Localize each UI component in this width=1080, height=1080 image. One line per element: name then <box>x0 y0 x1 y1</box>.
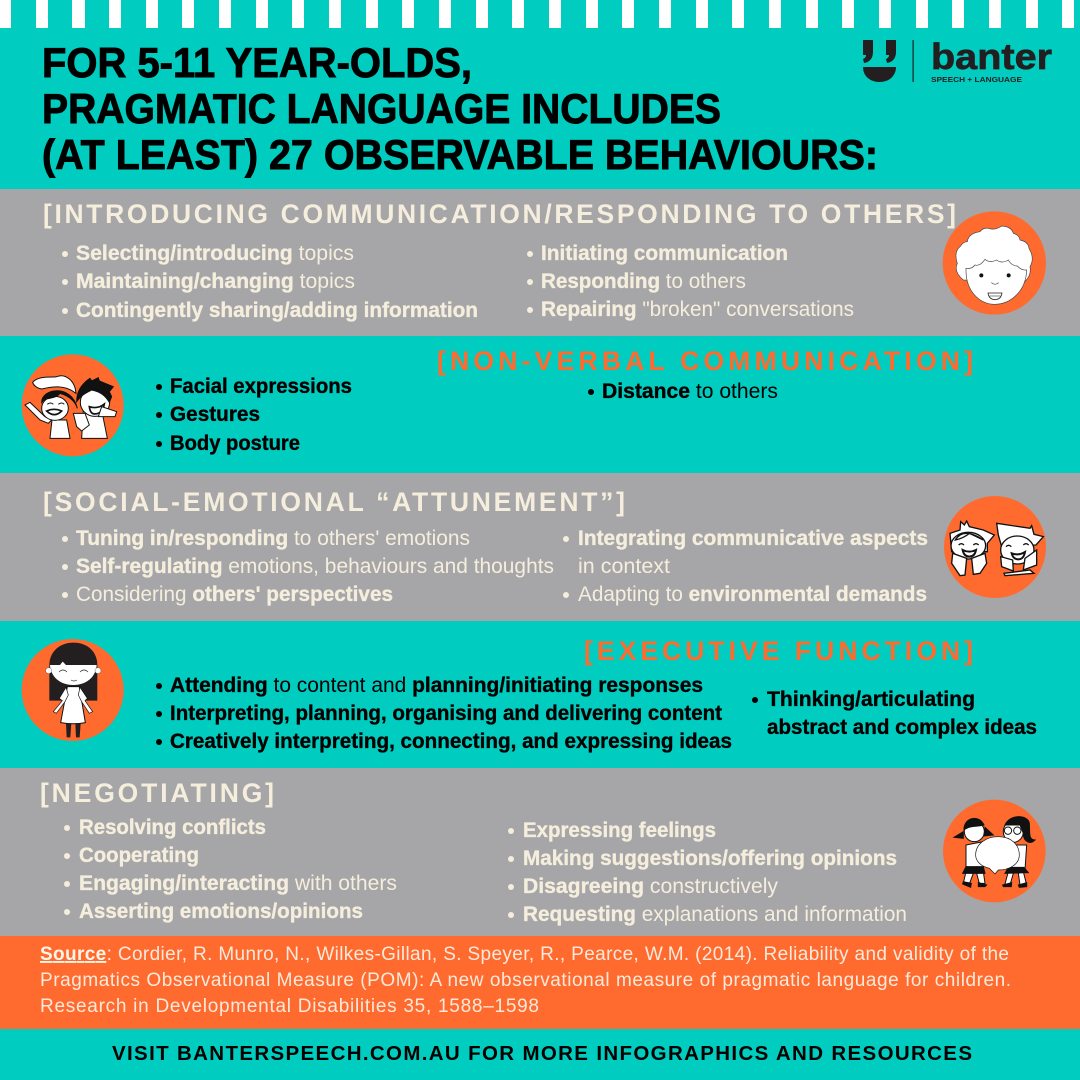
panel: introducing communication <box>0 189 1080 336</box>
text: source citation <box>40 944 1011 1017</box>
bullet list: right: Adapting to environmental demands <box>578 582 927 606</box>
bullet list: left: Tuning in/responding to others' emotions <box>76 526 470 550</box>
bullet list: left: Resolving conflicts <box>79 815 266 839</box>
logo: banter speech and language: SPEECH + LANGUAGE <box>931 75 1022 84</box>
bullet list: right: Integrating communicative aspects <box>578 526 928 550</box>
bullet list: left: Contingently sharing/adding information <box>76 298 478 322</box>
bullet list: right: in context <box>578 554 670 578</box>
panel: social-emotional attunement <box>0 473 1080 621</box>
panel: executive function <box>0 621 1080 768</box>
logo: banter speech and language <box>863 36 1052 84</box>
bullet list: left: Gestures <box>170 402 260 426</box>
bullet list: right: Disagreeing constructively <box>523 874 778 898</box>
icon: two children resting on hands <box>944 496 1046 598</box>
bullet list: right: Requesting explanations and information <box>523 902 907 926</box>
heading: executive function: [EXECUTIVE FUNCTION] <box>584 636 973 666</box>
text: source citation: Pragmatics Observational Measure (POM): A new observational measure of pragmatic language for children. <box>40 970 1011 991</box>
bullet list: left: Engaging/interacting with others <box>79 871 397 895</box>
bullet list: right <box>527 241 854 321</box>
bullet list: left: Body posture <box>170 431 300 455</box>
heading: social-emotional attunement: [SOCIAL-EMOTIONAL “ATTUNEMENT”] <box>43 487 625 517</box>
footer call to action: VISIT BANTERSPEECH.COM.AU FOR MORE INFOGRAPHICS AND RESOURCES <box>112 1042 972 1065</box>
bullet list: left <box>64 815 397 923</box>
bullet list: right: Distance to others <box>602 379 778 403</box>
icon: curly-haired child <box>943 211 1046 315</box>
bullet list: right: Repairing "broken" conversations <box>541 297 854 321</box>
bullet list: left: Cooperating <box>79 843 199 867</box>
bullet list: left: Self-regulating emotions, behaviours and thoughts <box>76 554 554 578</box>
icon: two laughing children <box>22 354 124 456</box>
bullet list: left: Attending to content and planning/initiating responses <box>170 673 703 697</box>
logo: banter speech and language: banter <box>931 36 1052 77</box>
bullet list: left: Selecting/introducing topics <box>76 241 354 265</box>
heading: non-verbal communication: [NON-VERBAL COMMUNICATION] <box>437 346 973 376</box>
heading: introducing communication: [INTRODUCING COMMUNICATION/RESPONDING TO OTHERS] <box>43 199 956 229</box>
panel: non-verbal communication <box>0 336 1080 473</box>
bullet list: right <box>752 687 1037 739</box>
bullet list: right: Expressing feelings <box>523 818 716 842</box>
text: source citation: Source: Cordier, R. Munro, N., Wilkes-Gillan, S. Speyer, R., Pearce, W.M. (2014). Reliability and validity of the <box>40 944 1009 965</box>
icon: girl with dark hair <box>22 639 124 741</box>
bullet list: left: Considering others' perspectives <box>76 582 393 606</box>
title: (AT LEAST) 27 OBSERVABLE BEHAVIOURS: <box>42 131 878 178</box>
panel: source <box>0 936 1080 1029</box>
bullet list: right: Initiating communication <box>541 241 788 265</box>
bullet list: left: Creatively interpreting, connecting, and expressing ideas <box>170 729 732 753</box>
bullet list: left <box>156 673 732 753</box>
text: source citation: Research in Developmental Disabilities 35, 1588–1598 <box>40 996 539 1017</box>
bullet list: right: Responding to others <box>541 269 746 293</box>
heading: negotiating: [NEGOTIATING] <box>40 778 274 808</box>
bullet list: right <box>563 526 928 606</box>
title <box>42 39 878 178</box>
bullet list: left <box>156 374 352 455</box>
icon: two girls with speech bubble <box>943 800 1046 902</box>
bullet list: right <box>508 818 907 926</box>
bullet list: left: Interpreting, planning, organising and delivering content <box>170 701 722 725</box>
bullet list: right: Thinking/articulating <box>767 687 975 711</box>
bullet list: left: Asserting emotions/opinions <box>79 899 363 923</box>
bullet list: left: Facial expressions <box>170 374 352 398</box>
bullet list: left: Maintaining/changing topics <box>76 269 355 293</box>
bullet list: right: Making suggestions/offering opinions <box>523 846 897 870</box>
panel: negotiating <box>0 768 1080 936</box>
title: FOR 5-11 YEAR-OLDS, <box>42 39 472 86</box>
bullet list: right: abstract and complex ideas <box>767 715 1037 739</box>
bullet list: left <box>62 241 478 322</box>
title: PRAGMATIC LANGUAGE INCLUDES <box>42 85 721 132</box>
bullet list: left <box>62 526 554 606</box>
